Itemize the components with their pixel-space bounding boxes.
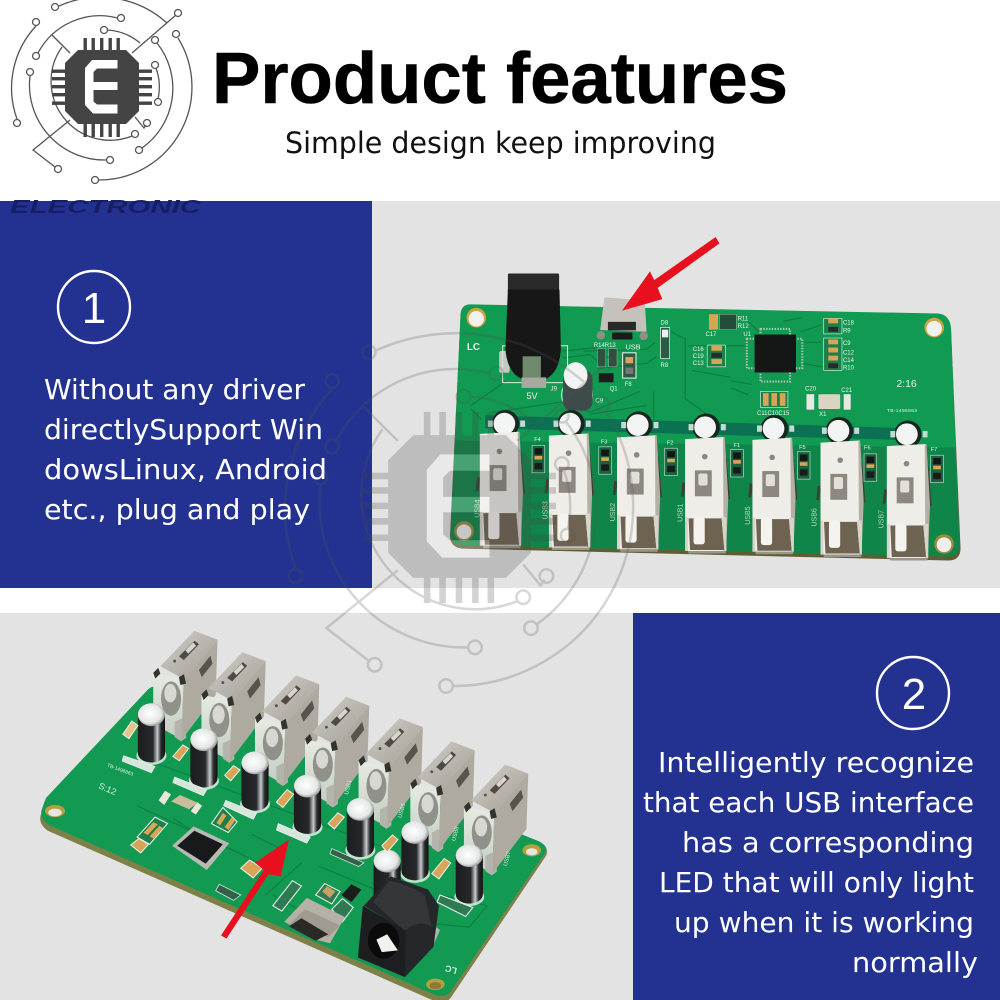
silkscreen labels: D8: [661, 321, 669, 327]
seven USB ports: [476, 432, 932, 561]
feature 1: description: Without any driver: [44, 373, 305, 406]
silkscreen labels: F2: [667, 441, 673, 447]
silkscreen labels: R10: [843, 366, 855, 372]
silkscreen labels: C19: [693, 354, 704, 360]
panel: feature 2 blue: [633, 613, 1000, 1000]
silkscreen labels: C16: [693, 347, 704, 353]
silkscreen labels: Q1: [610, 387, 618, 393]
silkscreen labels: 2:16: [896, 378, 917, 390]
mounting holes: [45, 805, 541, 990]
silkscreen labels: R12: [738, 324, 749, 330]
silkscreen labels: F4: [534, 437, 541, 443]
feature 2: description: that each USB interface: [643, 786, 974, 819]
silkscreen labels: R9: [843, 328, 851, 334]
logo wordmark: ELECTRONIC: [10, 197, 203, 217]
silkscreen labels: F1: [734, 443, 740, 449]
subtitle: Simple design keep improving: [285, 126, 716, 160]
title: Product features: [212, 39, 788, 119]
silkscreen labels: C9: [595, 398, 604, 405]
silkscreen labels: F7: [931, 447, 937, 453]
silkscreen labels: USB5: [398, 803, 407, 819]
main controller chip: [747, 329, 802, 382]
feature 2: description: up when it is working: [674, 906, 974, 939]
LED strip shading: [485, 415, 920, 441]
board shadow edge: [450, 308, 961, 561]
silkscreen labels: TB-1496863: [106, 763, 134, 778]
silkscreen labels: LC: [443, 963, 458, 976]
fuse pads: [532, 445, 943, 483]
silkscreen labels: 5V: [526, 391, 539, 401]
silkscreen labels: LC: [467, 342, 480, 353]
silkscreen labels: USB1: [344, 780, 354, 796]
silkscreen labels: USB6: [451, 826, 461, 842]
silkscreen labels: J9: [550, 386, 558, 393]
capacitors: [136, 703, 484, 911]
silkscreen labels: [467, 317, 937, 453]
logo: circuit chip: [12, 0, 192, 183]
silkscreen labels: [97, 763, 513, 976]
silkscreen labels: C20: [805, 387, 817, 393]
silkscreen labels: U1: [743, 332, 752, 338]
mounting holes: [454, 308, 954, 554]
seven USB ports: [153, 631, 528, 875]
silkscreen labels: C17: [705, 332, 717, 338]
micro USB socket: [597, 297, 648, 340]
board edge: [40, 688, 547, 1000]
photo: top PCB hub board: [450, 237, 961, 561]
electrolytic capacitor C9: [562, 362, 592, 411]
port labels: [474, 499, 885, 528]
silkscreen labels: C18: [843, 321, 855, 327]
feature 2: description: normally: [852, 946, 978, 979]
silkscreen labels: F8: [625, 382, 632, 388]
green board surface: [41, 686, 546, 996]
port labels: USB7: [878, 510, 885, 528]
silkscreen labels: R8: [661, 363, 669, 369]
silkscreen labels: F5: [799, 445, 806, 451]
DC power jack: [358, 876, 440, 977]
port labels: USB2: [610, 503, 617, 521]
darker lower board area: [451, 441, 959, 556]
micro USB socket: [284, 898, 345, 943]
silkscreen labels: C12: [843, 351, 855, 357]
silkscreen labels: C14: [843, 358, 855, 364]
panel: top-right image background: [372, 201, 1000, 588]
port labels: USB3: [543, 501, 550, 519]
port labels: USB6: [812, 508, 819, 526]
green board: [451, 304, 959, 556]
feature 2: description: LED that will only light: [659, 866, 974, 899]
silkscreen labels: USB: [625, 342, 641, 351]
feature 2: description: Intelligently recognize: [658, 746, 974, 779]
feature 1: description: dowsLinux, Android: [44, 453, 327, 486]
feature 1: number badge: [58, 271, 130, 343]
SMD components: [122, 721, 473, 922]
feature 2: description: [643, 746, 978, 979]
feature 2: number badge: [877, 657, 949, 729]
silkscreen labels: C11C10C15: [757, 411, 790, 417]
silkscreen labels: R11: [738, 317, 749, 323]
silkscreen labels: C9: [843, 341, 851, 347]
feature 1: description: directlySupport Win: [44, 413, 323, 446]
panel: feature 1 blue: [0, 201, 372, 588]
arrow: red pointer to LED: [221, 840, 289, 939]
LEDs and capacitors above ports: [488, 410, 928, 448]
silkscreen labels: X1: [819, 412, 827, 418]
photo: bottom angled PCB: [40, 631, 547, 1000]
silkscreen labels: C13: [693, 361, 704, 367]
feature 1: description: etc., plug and play: [44, 493, 310, 526]
silkscreen labels: USB7: [503, 851, 513, 867]
feature 1: number badge: 1: [82, 284, 106, 333]
silkscreen labels: F6: [864, 446, 871, 452]
port labels: USB1: [677, 504, 684, 522]
arrow: red pointer to USB socket: [622, 237, 719, 311]
DC power jack: [499, 274, 568, 388]
port labels: USB5: [745, 506, 752, 525]
port labels: USB4: [474, 499, 481, 518]
silkscreen labels: S:12: [97, 781, 118, 797]
feature 1: description: [44, 373, 327, 526]
main controller chip: [172, 826, 229, 870]
copper traces: [137, 763, 487, 931]
silkscreen labels: C21: [841, 388, 853, 394]
feature 2: description: has a corresponding: [682, 826, 974, 859]
silkscreen labels: F3: [601, 439, 607, 445]
copper traces: [471, 318, 822, 426]
panel: bottom-left image background: [0, 613, 633, 1000]
watermark: large circuit logo: [285, 333, 633, 693]
silkscreen labels: TB-1496863: [887, 408, 917, 414]
silkscreen labels: R14R13: [594, 343, 616, 349]
SMD components: [597, 314, 851, 410]
feature 2: number badge: 2: [902, 670, 926, 719]
